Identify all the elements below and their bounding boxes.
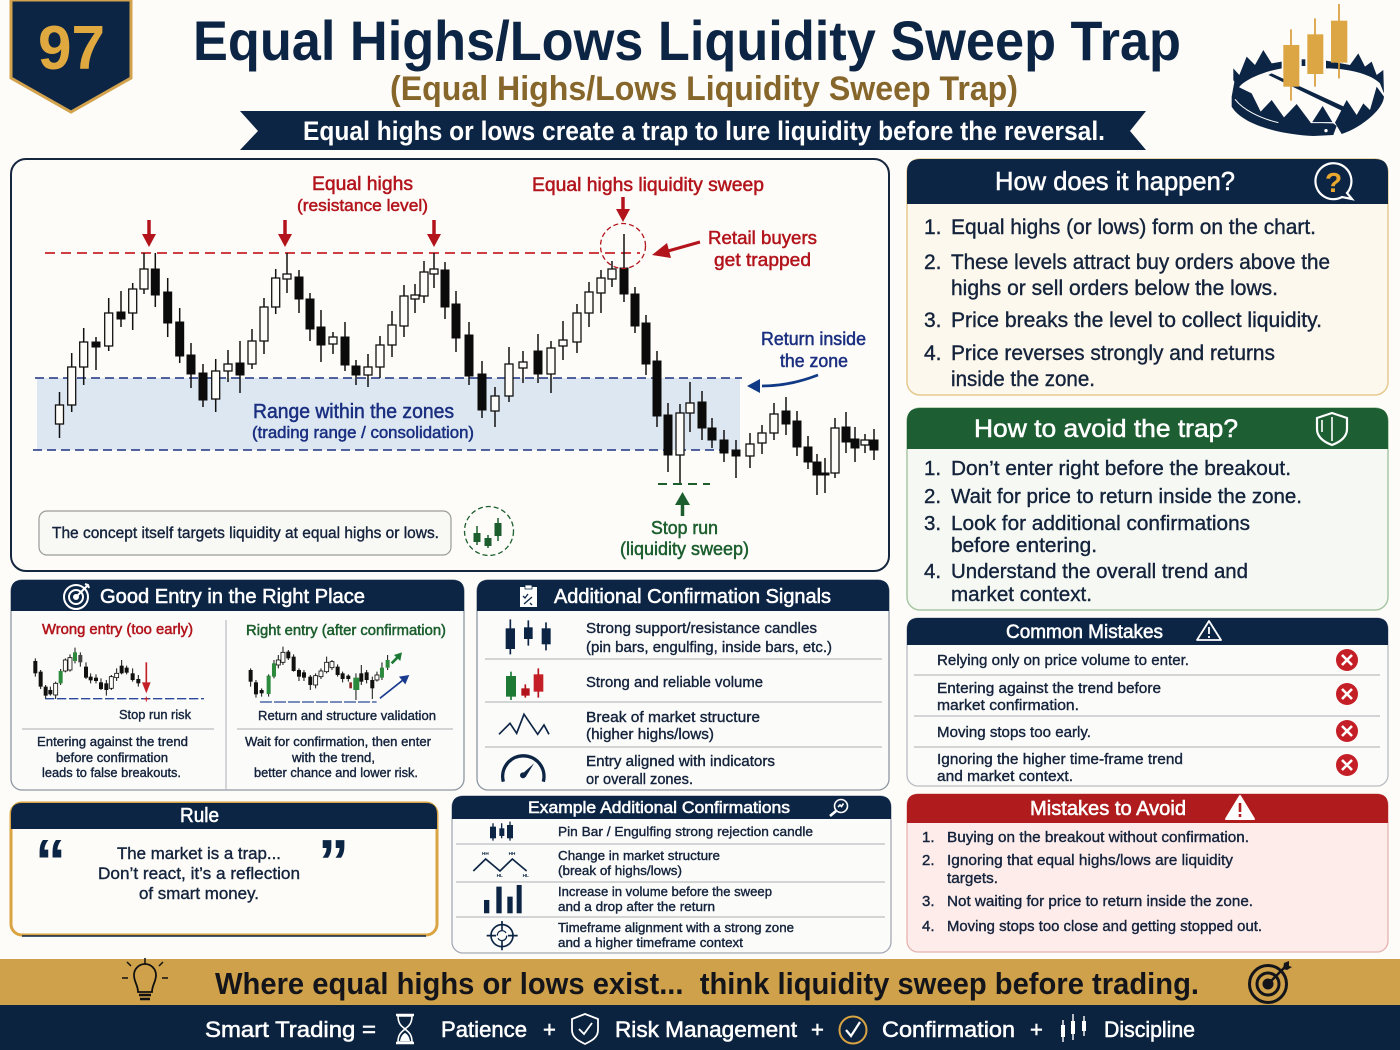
- header: [907, 794, 1388, 823]
- text: rule quote: The market is a trap...: [117, 844, 281, 863]
- text: smart trading: Smart Trading =: [205, 1017, 376, 1042]
- banner: gold takeaway: [0, 958, 1400, 1005]
- list: 2.: [924, 485, 941, 508]
- quote marks: “: [35, 828, 66, 897]
- icon: target: [64, 584, 89, 609]
- text: signals: Entry aligned with indicators: [586, 753, 775, 770]
- text: signals: Strong and reliable volume: [586, 674, 763, 691]
- text: signals: Strong support/resistance candles: [586, 620, 817, 637]
- list: These levels attract buy orders above the: [951, 251, 1330, 274]
- list: 2.: [922, 852, 935, 869]
- icon: clipboard: [520, 585, 537, 607]
- icon: question bubble: ?: [1325, 167, 1342, 198]
- text: right entry explanation: better chance and lower risk.: [254, 765, 418, 780]
- list: Buying on the breakout without confirmation.: [947, 829, 1249, 846]
- list: Price reverses strongly and returns: [951, 342, 1275, 365]
- text: right entry explanation: with the trend,: [291, 750, 375, 765]
- panel: rule: [11, 803, 437, 936]
- label: return inside: Return inside: [761, 329, 866, 349]
- panel: mistakes to avoid: [907, 794, 1388, 952]
- panel: main chart: [11, 159, 889, 571]
- mistakes list: Relying only on price volume to enter.: [937, 652, 1189, 669]
- icons: examples: HH: [509, 851, 516, 856]
- mistakes list: Ignoring the higher time-frame trend: [937, 751, 1183, 768]
- title: Equal Highs/Lows Liquidity Sweep Trap: [193, 9, 1181, 72]
- icons: examples: HL: [523, 873, 529, 878]
- panel: additional confirmation signals: [477, 580, 889, 790]
- text: examples: Change in market structure: [558, 848, 720, 863]
- text: wrong entry explanation: [37, 734, 188, 780]
- list: Moving stops too close and getting stopped out.: [947, 918, 1262, 935]
- list: [924, 457, 1302, 606]
- arrow: return inside: [747, 375, 818, 393]
- icons: examples: [473, 822, 529, 950]
- header: Example Additional Confirmations: [528, 799, 790, 817]
- text: examples: and a drop after the return: [558, 899, 715, 914]
- icon: light bulb: [122, 958, 168, 999]
- list: 4.: [922, 918, 935, 935]
- text: discipline: Discipline: [1104, 1017, 1195, 1042]
- icon: target: [1250, 961, 1292, 1002]
- text: examples: Increase in volume before the sweep: [558, 884, 772, 899]
- label: stop run: [620, 518, 749, 559]
- header: [11, 580, 464, 611]
- text: signals: or overall zones.: [586, 771, 693, 788]
- list: Price breaks the level to collect liquidity.: [951, 309, 1322, 332]
- text: signals: (higher highs/lows): [586, 726, 714, 743]
- plus: +: [811, 1017, 824, 1042]
- list: Wait for price to return inside the zone.: [951, 485, 1302, 508]
- list: inside the zone.: [951, 368, 1095, 391]
- label: equal highs: Equal highs: [312, 174, 413, 195]
- label: range: [252, 401, 474, 442]
- text: confirmation: Confirmation: [882, 1017, 1015, 1042]
- icon: bear trap with candles: [1232, 4, 1384, 136]
- stop run marker: [658, 484, 710, 516]
- list: 4.: [924, 560, 941, 583]
- takeaway text: Where equal highs or lows exist... think liquidity sweep before trading.: [215, 966, 1199, 1001]
- text: wrong entry explanation: before confirmation: [56, 750, 168, 765]
- icon: candles: [1061, 1014, 1086, 1042]
- text: signals: [586, 620, 832, 788]
- icon: warning outline: [1197, 621, 1221, 640]
- subtitle: (Equal Highs/Lows Liquidity Sweep Trap): [390, 70, 1018, 108]
- text: risk management: Risk Management: [615, 1017, 797, 1042]
- header: How to avoid the trap?: [974, 415, 1238, 443]
- label: return inside: [761, 329, 866, 371]
- list: 1.: [924, 216, 942, 239]
- list: Look for additional confirmations: [951, 512, 1250, 535]
- icons: examples: HH: [482, 851, 489, 856]
- text: examples: (break of highs/lows): [558, 863, 682, 878]
- list: 3.: [924, 512, 941, 535]
- label: liquidity sweep: Equal highs liquidity sweep: [532, 175, 764, 196]
- text: patience: Patience: [441, 1017, 527, 1042]
- list: 1.: [924, 457, 941, 480]
- text: rule quote: of smart money.: [139, 884, 259, 903]
- quote marks: [35, 828, 349, 897]
- header: [452, 796, 891, 819]
- list: 3.: [922, 893, 935, 910]
- arrows: equal high markers: [142, 197, 630, 247]
- text: signals: (pin bars, engulfing, inside bars, etc.): [586, 639, 832, 656]
- icon: check circle: [840, 1016, 866, 1044]
- icon: hourglass: [396, 1015, 414, 1043]
- callout: concept note: The concept itself targets liquidity at equal highs or lows.: [52, 525, 439, 542]
- label: return and structure: Return and structure validation: [258, 708, 436, 723]
- text: wrong entry explanation: Entering against the trend: [37, 734, 188, 749]
- mistakes list: [937, 652, 1189, 785]
- sweep circle: [600, 224, 646, 268]
- list: 2.: [924, 251, 942, 274]
- header: Common Mistakes: [1006, 622, 1163, 643]
- header: Rule: [180, 805, 219, 827]
- icon: magnifier: [830, 800, 848, 816]
- label: wrong entry: Wrong entry (too early): [42, 622, 193, 638]
- equal highs level line: [45, 252, 640, 254]
- ribbon tagline: [240, 111, 1146, 150]
- mistakes list: Entering against the trend before: [937, 680, 1161, 697]
- list: 1.: [922, 829, 935, 846]
- header: [477, 580, 889, 611]
- list: Don’t enter right before the breakout.: [951, 457, 1291, 480]
- label: equal highs: (resistance level): [297, 196, 428, 215]
- chart: wrong entry: [33, 648, 204, 702]
- header: How does it happen?: [995, 166, 1235, 196]
- header: [907, 408, 1388, 449]
- list: Understand the overall trend and: [951, 560, 1248, 583]
- label: equal highs: [297, 174, 428, 215]
- text: examples: [558, 824, 813, 950]
- list: 4.: [924, 342, 942, 365]
- header: [907, 159, 1388, 204]
- list: market context.: [951, 583, 1092, 606]
- panel: how to avoid the trap: [907, 408, 1388, 610]
- list: Not waiting for price to return inside the zone.: [947, 893, 1253, 910]
- arrow: retail buyers: [652, 242, 700, 258]
- text: signals: Break of market structure: [586, 709, 760, 726]
- panel: example additional confirmations: [452, 796, 891, 953]
- text: right entry explanation: [245, 734, 432, 780]
- label: stop run: (liquidity sweep): [620, 539, 749, 559]
- text: right entry explanation: Wait for confirmation, then enter: [245, 734, 432, 749]
- text: examples: Timeframe alignment with a strong zone: [558, 920, 794, 935]
- header: Mistakes to Avoid: [1030, 798, 1186, 820]
- text: wrong entry explanation: leads to false breakouts.: [42, 765, 181, 780]
- text: examples: and a higher timeframe context: [558, 935, 743, 950]
- label: range: Range within the zones: [253, 401, 454, 423]
- list: before entering.: [951, 534, 1097, 557]
- text: examples: Pin Bar / Engulfing strong rejection candle: [558, 824, 813, 839]
- quote marks: ”: [318, 828, 349, 897]
- mistakes list: Moving stops too early.: [937, 724, 1091, 741]
- icon: shield: [1317, 413, 1347, 445]
- text: rule quote: [98, 844, 300, 903]
- list: Ignoring that equal highs/lows are liquidity: [947, 852, 1234, 869]
- header: Additional Confirmation Signals: [554, 586, 831, 608]
- panel: common mistakes: [907, 618, 1388, 786]
- list: targets.: [947, 870, 998, 887]
- icon: green candles circle: [464, 506, 514, 556]
- range zone: [33, 378, 742, 450]
- header: [907, 618, 1388, 645]
- text: rule quote: Don’t react, it’s a reflection: [98, 864, 300, 883]
- list: [924, 216, 1330, 391]
- icon: shield check: [572, 1014, 598, 1044]
- list: 3.: [924, 309, 942, 332]
- panel: how does it happen: [907, 159, 1388, 395]
- label: range: (trading range / consolidation): [252, 424, 474, 442]
- callout: concept note: [39, 511, 451, 555]
- header: Good Entry in the Right Place: [100, 586, 365, 608]
- icons: examples: HL: [497, 873, 503, 878]
- list: Equal highs (or lows) form on the chart.: [951, 216, 1316, 239]
- label: retail buyers: [708, 227, 817, 270]
- icon: question bubble: [1315, 163, 1352, 199]
- panel: good entry in the right place: [11, 580, 464, 790]
- label: right entry: Right entry (after confirmation): [246, 623, 446, 639]
- mistakes list: and market context.: [937, 768, 1073, 785]
- icons: red x marks: [1336, 649, 1358, 776]
- footer: smart trading formula: [0, 1005, 1400, 1050]
- badge: number 97: 97: [38, 14, 105, 83]
- icons: confirmation signals: [499, 619, 551, 782]
- chart: right entry: [249, 647, 409, 702]
- icon: warning solid: [1226, 796, 1254, 819]
- label: stop run risk: Stop run risk: [119, 707, 191, 722]
- list: highs or sell orders below the lows.: [951, 277, 1278, 300]
- badge: number 97: [11, 0, 131, 112]
- plus: +: [1030, 1017, 1043, 1042]
- list: [922, 829, 1262, 935]
- label: stop run: Stop run: [651, 518, 718, 538]
- plus: +: [543, 1017, 556, 1042]
- candlestick chart: [56, 234, 878, 495]
- label: return inside: the zone: [780, 351, 848, 371]
- label: retail buyers: get trapped: [714, 249, 811, 270]
- ribbon tagline: Equal highs or lows create a trap to lure liquidity before the reversal.: [303, 116, 1105, 146]
- label: retail buyers: Retail buyers: [708, 227, 817, 248]
- mistakes list: market confirmation.: [937, 697, 1079, 714]
- header: [11, 803, 437, 829]
